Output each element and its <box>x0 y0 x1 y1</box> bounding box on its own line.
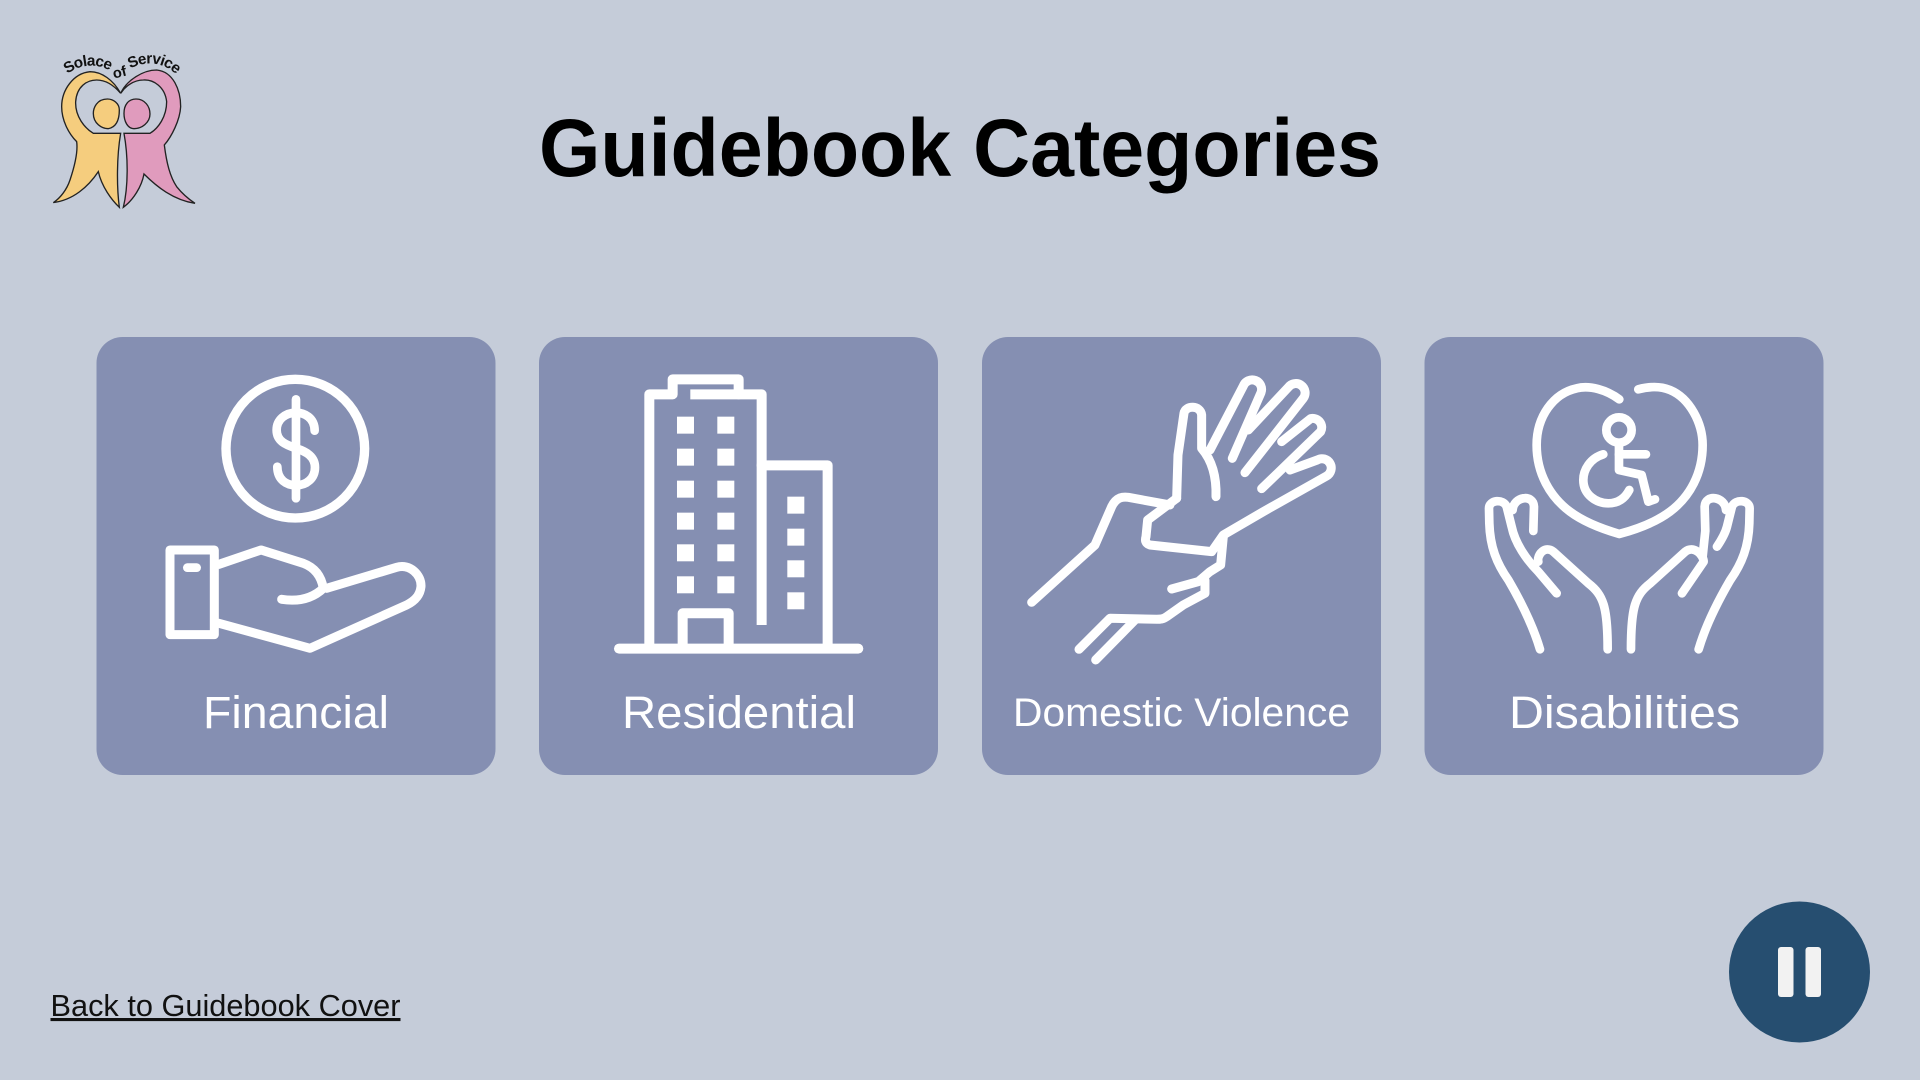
panel: Disabilities <box>1424 337 1824 775</box>
icon: hand gripping wrist <box>1032 380 1331 660</box>
icon: hands holding heart with wheelchair symbol <box>1489 387 1750 649</box>
card background <box>96 337 496 775</box>
pause button <box>1729 902 1870 1042</box>
label: Disabilities <box>1509 687 1740 738</box>
card background <box>539 337 938 775</box>
icon: buildings <box>619 379 858 649</box>
title: Guidebook Categories <box>539 103 1381 194</box>
logo: pink head <box>124 99 150 129</box>
logo: yellow figure <box>53 72 121 207</box>
link: back to guidebook cover: Back to Guidebook Cover <box>50 988 400 1023</box>
logo: pink figure <box>121 70 195 207</box>
panel: Financial <box>96 337 496 775</box>
logo text: of: of <box>111 64 128 83</box>
panel: Residential <box>539 337 938 775</box>
windows <box>677 417 804 609</box>
panel: Domestic Violence <box>982 337 1381 775</box>
logo: Solace of Service <box>53 54 196 209</box>
card background <box>1424 337 1824 775</box>
building outlines <box>619 379 858 649</box>
card background <box>982 337 1381 775</box>
logo text: Solace: Solace <box>64 54 112 72</box>
label: Domestic Violence <box>1013 691 1350 735</box>
logo text: Service: Service <box>128 54 180 73</box>
icon: hand holding dollar coin <box>170 379 421 648</box>
label: Financial <box>203 687 389 738</box>
label: Residential <box>622 687 856 738</box>
logo: yellow head <box>93 99 119 129</box>
